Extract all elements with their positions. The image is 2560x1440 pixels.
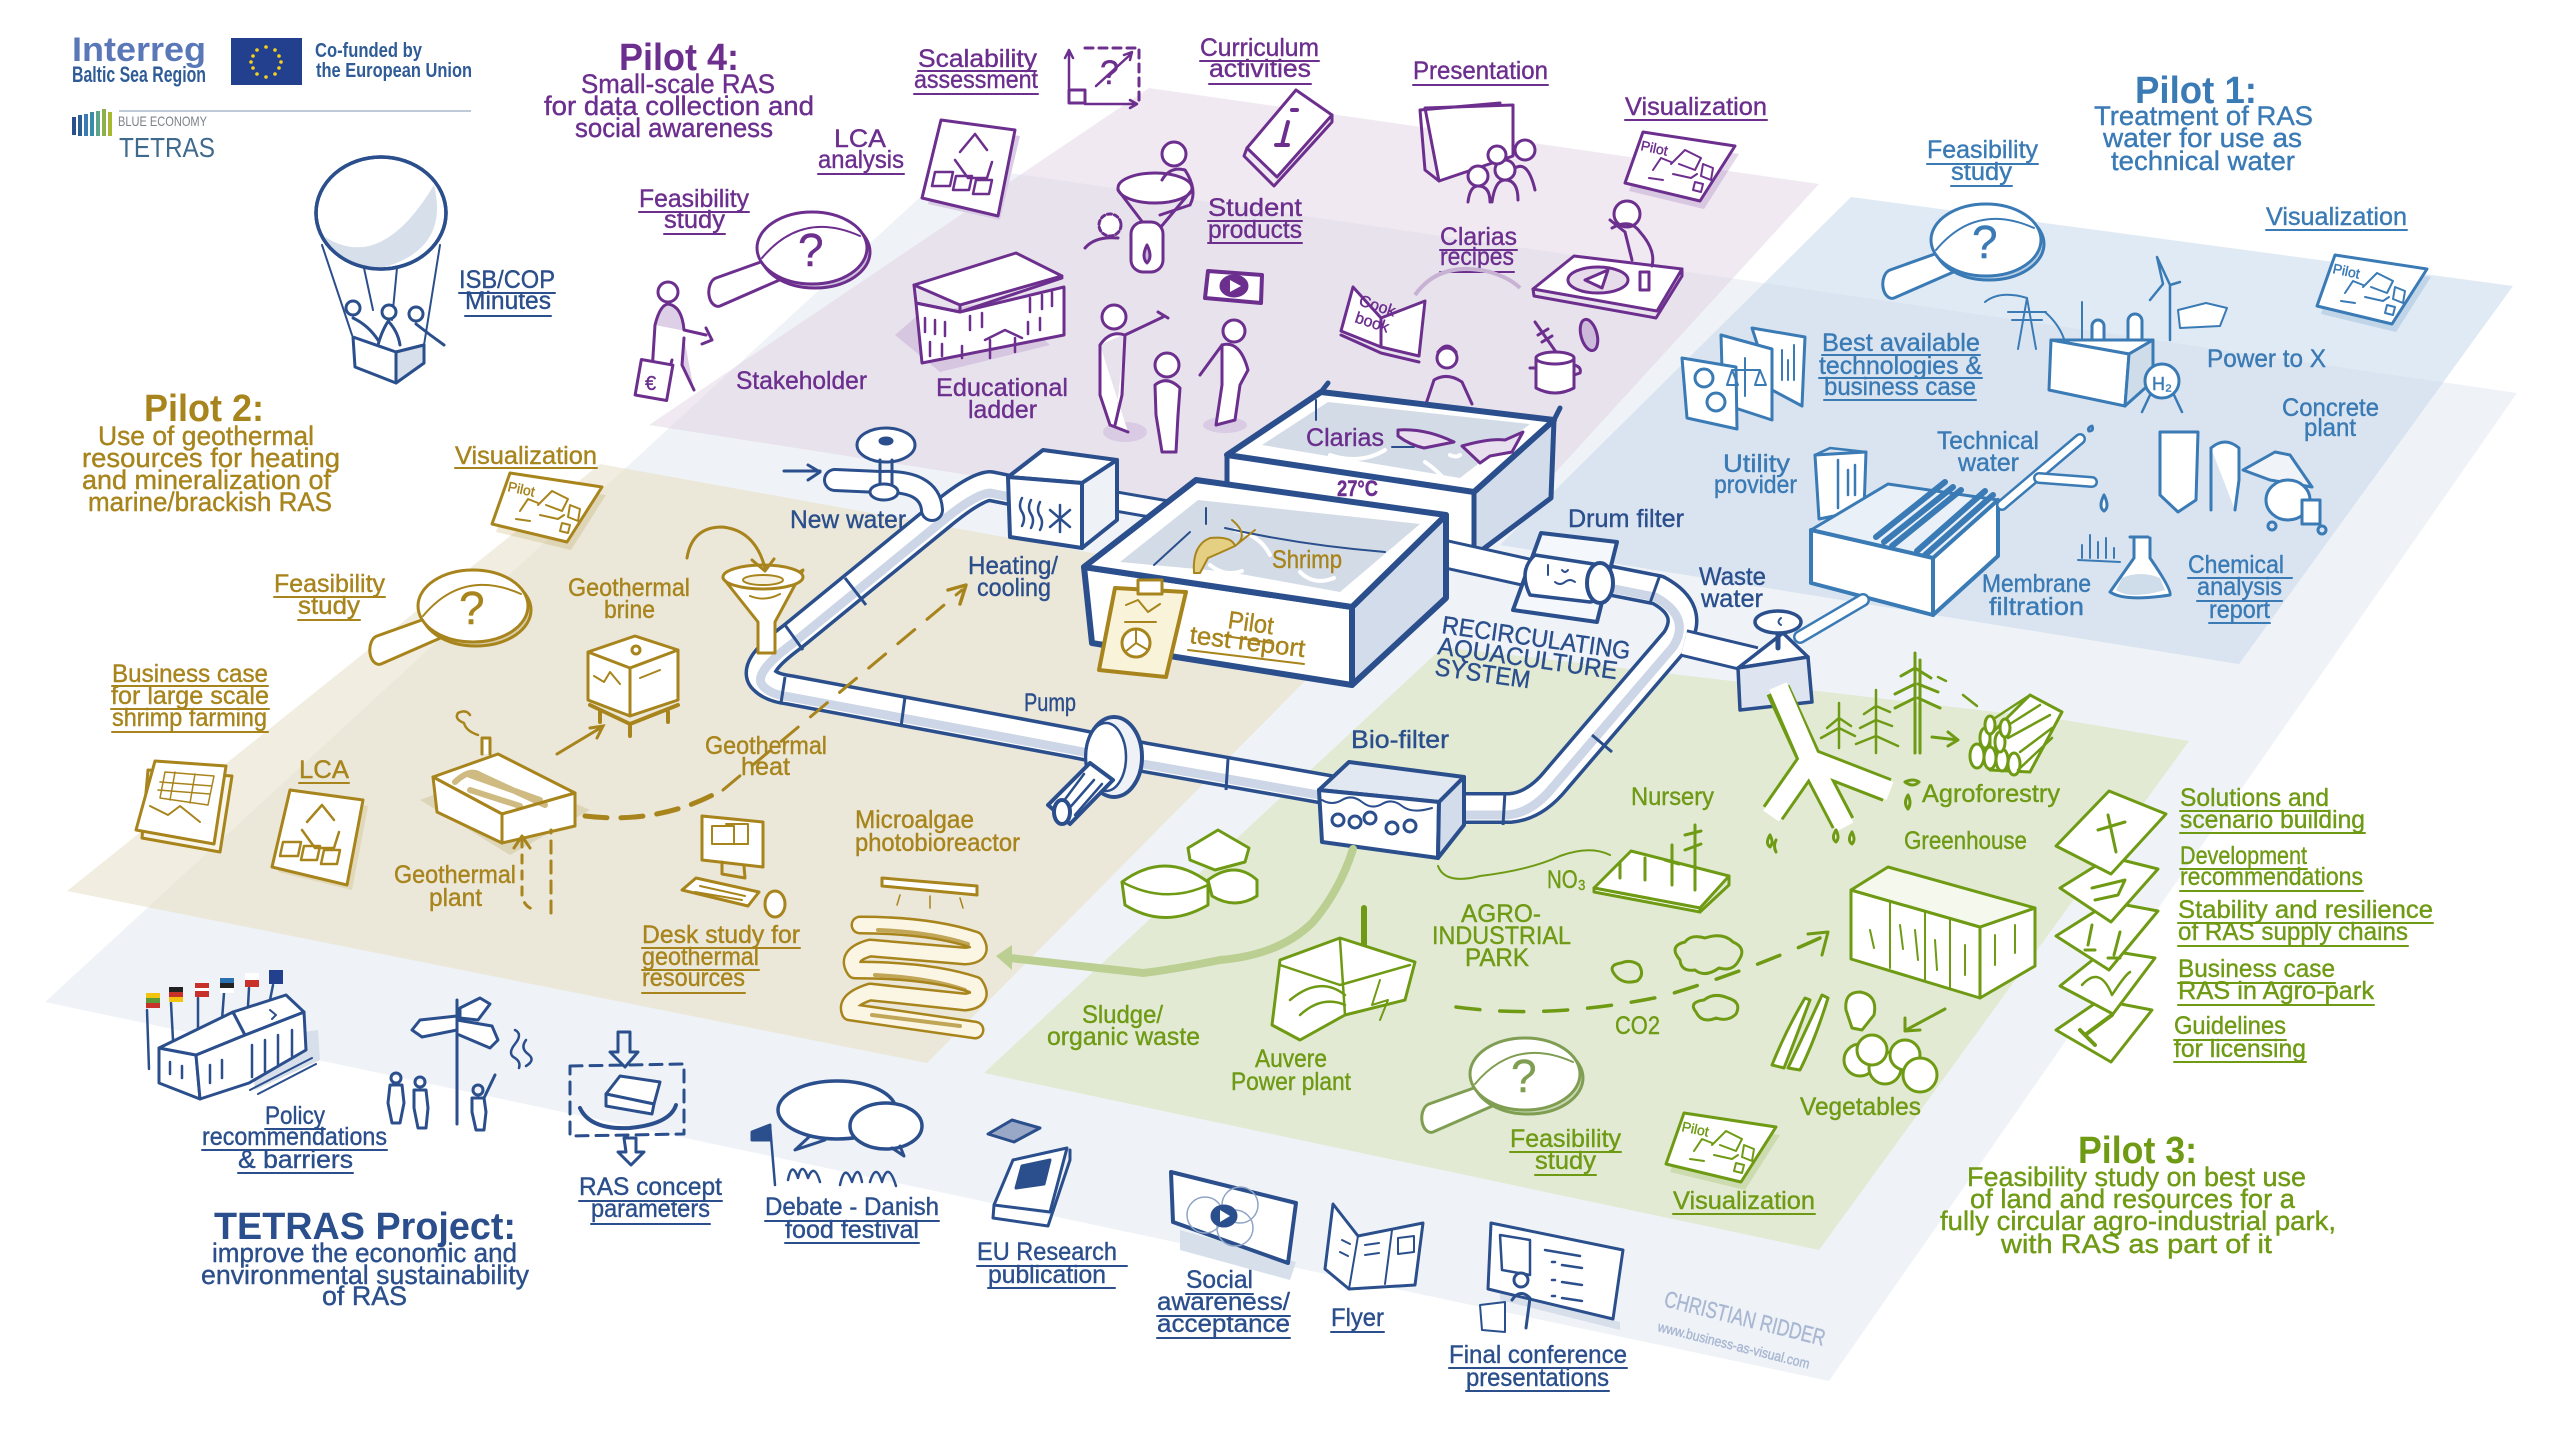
- icon: stacked cards: [2056, 791, 2166, 1062]
- label: LCA analysis: LCA: [834, 125, 886, 153]
- icon: signpost and people: [388, 998, 532, 1130]
- label: Feasibility study blue: Feasibility: [1927, 136, 2038, 164]
- heading: Pilot 3: of land and resources for a: [1970, 1184, 2296, 1214]
- label: Microalgae photobioreactor: Microalgae: [855, 806, 974, 834]
- icon: geothermal brine crate: [588, 636, 678, 736]
- icon: pump: [1048, 717, 1142, 824]
- label: Student products: products: [1208, 216, 1302, 244]
- label: Final conference presentations: presentations: [1466, 1364, 1609, 1392]
- label: LCA gold: LCA: [299, 756, 349, 784]
- label: Feasibility study green: study: [1535, 1147, 1596, 1175]
- label: Feasibility study gold: study: [298, 592, 361, 620]
- label: Clarias recipes: Clarias: [1440, 223, 1517, 251]
- EU flag: [231, 38, 302, 85]
- label: Geothermal brine: Geothermal: [568, 574, 690, 602]
- label: Heating/cooling: cooling: [977, 574, 1051, 602]
- icon: membrane filtration box: [1811, 482, 1998, 615]
- icon: scalability: ?: [1100, 54, 1119, 92]
- icon: visualization board gold: [492, 473, 606, 550]
- heading: Pilot 1: Pilot 1:: [2135, 70, 2257, 112]
- icon: bio-filter box: [1319, 762, 1464, 858]
- label: Stability and resilience of RAS supply chains: of RAS supply chains: [2178, 918, 2408, 946]
- label: Recirculating Aquaculture System: AQUACULTURE: [1436, 632, 1619, 685]
- label: Guidelines for licensing: for licensing: [2174, 1035, 2306, 1063]
- icon: biogas tanks: [1122, 830, 1257, 918]
- label: Feasibility study blue: study: [1951, 158, 2012, 186]
- icon: shrimp: [1194, 520, 1255, 573]
- icon: visualization board green: [1666, 1113, 1780, 1190]
- label: Feasibility study purple: study: [664, 206, 725, 234]
- icon: stakeholder with suitcase: €: [645, 373, 656, 395]
- label: Chemical analysis report: Chemical: [2188, 551, 2284, 579]
- icon: new water valve: [784, 428, 932, 510]
- icon: RAS concept dashed box: [570, 1032, 684, 1165]
- label: EU Research publication: EU Research: [977, 1238, 1117, 1266]
- label: Clarias recipes: recipes: [1440, 243, 1514, 271]
- icon: nitrate line to nursery: [1438, 850, 1610, 879]
- label: ISB/COP Minutes: Minutes: [465, 287, 551, 315]
- icon: arrow plant to brine: [557, 726, 603, 754]
- label: Stability and resilience of RAS supply chains: [2178, 896, 2433, 946]
- icon: video: [1205, 271, 1262, 303]
- label: Geothermal plant: [394, 861, 516, 912]
- icon: magnifier purple: ?: [798, 224, 824, 276]
- icon: power to X plant: [1985, 257, 2227, 412]
- icon: magnifier green: ?: [1511, 1050, 1537, 1102]
- label: Shrimp: Shrimp: [1272, 546, 1342, 574]
- icon: heat exchanger box: [1008, 450, 1117, 548]
- label: Presentation: Presentation: [1413, 57, 1548, 85]
- label: Clarias recipes: [1440, 223, 1517, 272]
- label: Debate Danish food festival: Debate - Danish: [765, 1193, 939, 1221]
- label: Agroforestry: Agroforestry: [1922, 780, 2060, 808]
- TETRAS text: TETRAS: [119, 132, 215, 163]
- European Union text: the European Union: [316, 60, 472, 82]
- label: Stability and resilience of RAS supply chains: Stability and resilience: [2178, 896, 2433, 924]
- label: Membrane filtration: Membrane: [1982, 570, 2091, 598]
- icon: gold funnel: [723, 565, 803, 653]
- credit: Christian Ridder: www.business-as-visual.com: [1655, 1318, 1812, 1372]
- label: Curriculum activities: Curriculum: [1200, 34, 1319, 62]
- background plane: pilot 4 purple: [649, 88, 1819, 555]
- label: Pilot test report: Pilot: [1226, 606, 1276, 640]
- icon: cook book: [1341, 287, 1425, 362]
- label: Concrete plant: plant: [2304, 414, 2356, 442]
- background plane: pilot 4 overlap: [649, 88, 1819, 555]
- icon: main pipe loop: [760, 486, 1755, 825]
- label: LCA analysis: [818, 125, 904, 174]
- icon: drum filter: [1513, 533, 1617, 622]
- label: Business case RAS in Agro-park: Business case: [2178, 955, 2335, 983]
- heading: Pilot 1: [2094, 70, 2313, 176]
- label: Best available technologies and business case: technologies &: [1819, 352, 1982, 380]
- icon: magnifier purple: [709, 212, 870, 306]
- credit: Christian Ridder: [1655, 1286, 1828, 1372]
- label: Chemical analysis report: analysis: [2197, 573, 2282, 601]
- label: Auvere Power plant: Auvere: [1255, 1045, 1327, 1073]
- icon: branching green pipe and drops: [1768, 686, 1919, 852]
- icon: desk study computer: [682, 816, 785, 917]
- label: Feasibility study gold: Feasibility: [274, 570, 385, 598]
- label: Utility provider: [1714, 450, 1797, 499]
- label: Business case for large scale shrimp farming: [111, 660, 269, 732]
- heading: Pilot 3: [1940, 1130, 2336, 1259]
- icon: power to X plant: H₂: [2152, 374, 2172, 394]
- label: Visualization gold: Visualization: [455, 442, 597, 470]
- icon: waste water outlet and pipe to membrane: [1738, 600, 1863, 710]
- icon: Auvere power plant: [1272, 908, 1415, 1040]
- label: Geothermal heat: Geothermal: [705, 732, 827, 760]
- label: Agro-industrial park: [1432, 900, 1571, 972]
- icon: sludge arrow: [1010, 849, 1353, 973]
- label: Guidelines for licensing: Guidelines: [2174, 1012, 2286, 1040]
- heading: Pilot 4: [544, 37, 814, 143]
- label: Sludge organic waste: Sludge/: [1082, 1001, 1163, 1029]
- icon: LCA document purple: [922, 120, 1020, 220]
- icon: magnifier blue: [1883, 204, 2044, 298]
- heading: Pilot 3: fully circular agro-industrial park,: [1940, 1206, 2336, 1236]
- label: Waste water: [1699, 563, 1766, 613]
- icon: cook book: Cook: [1357, 293, 1398, 321]
- label: Business case RAS in Agro-park: RAS in Agro-park: [2178, 977, 2375, 1005]
- label: Technical water: water: [1957, 449, 2019, 477]
- icon: magnifier gold: [370, 570, 531, 664]
- icon: debate speech bubbles and crowd: [752, 1081, 922, 1186]
- label: Educational ladder: Educational: [936, 374, 1068, 402]
- heading: Pilot 3: with RAS as part of it: [2000, 1229, 2273, 1259]
- label: Student products: Student: [1208, 194, 1302, 222]
- icon: student funnel and test tube: [1085, 142, 1193, 272]
- label: Sludge organic waste: organic waste: [1047, 1023, 1200, 1051]
- icon: clarias fish: [1398, 430, 1523, 463]
- heading: Pilot 4: Pilot 4:: [619, 37, 739, 79]
- label: Visualization blue: Visualization: [2266, 203, 2407, 231]
- label: Guidelines for licensing: [2174, 1012, 2306, 1063]
- icon: magnifier green: [1422, 1038, 1583, 1132]
- icon: parliament with flags: [146, 970, 320, 1099]
- heading: TETRAS Project: improve the economic and: [212, 1238, 517, 1268]
- label: Heating/cooling: [968, 552, 1058, 602]
- heading: Pilot 2: and mineralization of: [82, 465, 331, 495]
- co-funded text: Co-funded by: [315, 40, 423, 62]
- label: Microalgae photobioreactor: [855, 806, 1020, 857]
- label: Technical water: [1937, 427, 2039, 477]
- label: Curriculum activities: activities: [1209, 55, 1311, 83]
- label: Feasibility study purple: Feasibility: [639, 185, 749, 213]
- icon: visualization board gold: Pilot: [506, 478, 536, 500]
- background plane: pilot 2 overlap: [148, 468, 1304, 1063]
- label: Student products: [1208, 194, 1302, 244]
- label: Auvere Power plant: Power plant: [1231, 1068, 1351, 1096]
- label: Geothermal plant: Geothermal: [394, 861, 516, 889]
- label: RAS concept parameters: parameters: [591, 1195, 710, 1223]
- label: Greenhouse: Greenhouse: [1904, 827, 2027, 855]
- logo block: Blue Economy TETRAS: [74, 109, 471, 163]
- label: Clarias in tank: Clarias: [1306, 424, 1384, 452]
- heading: TETRAS Project: of RAS: [322, 1281, 407, 1311]
- label: Pilot test report: [1188, 606, 1307, 664]
- label: CO2: CO2: [1615, 1012, 1660, 1040]
- heading: Pilot 3: Pilot 3:: [2078, 1130, 2197, 1172]
- icon: concrete plant: [2160, 432, 2326, 534]
- label: Feasibility study purple: [639, 185, 749, 234]
- background plane: pilot 1 overlap: [1530, 328, 2442, 662]
- label: Business case for large scale shrimp farming: shrimp farming: [112, 704, 267, 732]
- icon: hot air balloon: [316, 157, 446, 383]
- label: Best available technologies and business case: Best available: [1822, 329, 1980, 357]
- icon: best available technology documents: [1682, 328, 1805, 429]
- icon: visualization board green: Pilot: [1680, 1118, 1710, 1140]
- label: Flyer: Flyer: [1331, 1304, 1384, 1332]
- label: Policy recommendations and barriers: & barriers: [238, 1146, 353, 1174]
- label: Concrete plant: Concrete: [2282, 394, 2379, 422]
- label: Educational ladder: [936, 374, 1068, 424]
- label: Waste water: water: [1700, 585, 1763, 613]
- icon: nursery planter: [1594, 825, 1729, 912]
- label: Recirculating Aquaculture System: RECIRCULATING: [1440, 611, 1632, 665]
- label: Membrane filtration: filtration: [1989, 593, 2084, 621]
- icon: forest trees: [1821, 653, 1977, 753]
- tank: Shrimp tank: [1084, 480, 1446, 685]
- label: Solutions and scenario building: [2180, 784, 2365, 834]
- icon: stakeholder with suitcase: [635, 282, 712, 401]
- icon: visualization board purple: [1625, 132, 1739, 209]
- heading: Pilot 2: Pilot 2:: [144, 388, 264, 430]
- icon: visualization board blue: [2317, 255, 2431, 332]
- heading: Pilot 4: for data collection and: [544, 91, 814, 121]
- label: Pump: Pump: [1024, 689, 1076, 717]
- icon: three people discussing: [1100, 305, 1248, 452]
- icon: technical water pipe: [2002, 426, 2107, 511]
- label: Social awareness acceptance: awareness/: [1157, 1288, 1290, 1316]
- heading: Pilot 2: Use of geothermal: [98, 421, 314, 451]
- label: Feasibility study gold: [274, 570, 385, 620]
- label: Concrete plant: [2282, 394, 2379, 442]
- icon: vegetables: [1772, 992, 1945, 1092]
- tank: Clarias tank: [1227, 383, 1560, 556]
- label: Geothermal plant: plant: [429, 884, 482, 912]
- heading: Pilot 3: Feasibility study on best use: [1967, 1162, 2306, 1192]
- label: Educational ladder: ladder: [968, 396, 1037, 424]
- label: Chemical analysis report: [2188, 551, 2292, 624]
- label: New water: New water: [790, 506, 906, 534]
- icon: LCA document gold: [272, 790, 368, 890]
- icon: business case documents gold: [136, 761, 232, 852]
- icon: utility building: [1815, 448, 1866, 519]
- icon: geothermal loop dashed arrows: [514, 830, 551, 913]
- label: Pilot test report: test report: [1188, 621, 1307, 663]
- label: Desk study for geothermal resources: geothermal: [642, 943, 759, 971]
- label: Agro-industrial park: PARK: [1465, 944, 1529, 972]
- icon: fish farmer: [1426, 346, 1472, 404]
- label: Technical water: Technical: [1937, 427, 2039, 455]
- icon: curriculum book: [1244, 90, 1332, 186]
- label: EU Research publication: publication: [988, 1261, 1106, 1289]
- heading: Pilot 2: marine/brackish RAS: [88, 487, 332, 517]
- label: Vegetables: Vegetables: [1800, 1093, 1921, 1121]
- icon: flyer: [1325, 1204, 1423, 1289]
- icon: stacked logs: [1970, 695, 2062, 775]
- label: Best available technologies and business case: business case: [1824, 373, 1976, 401]
- credit: Christian Ridder: CHRISTIAN RIDDER: [1662, 1286, 1828, 1351]
- label: RAS concept parameters: RAS concept: [579, 1173, 722, 1201]
- heading: Pilot 2: resources for heating: [82, 443, 340, 473]
- icon: CO2 clouds: [1612, 936, 1742, 1020]
- label: Development recommendations: Development: [2180, 842, 2307, 870]
- label: Geothermal heat: [705, 732, 827, 781]
- label: Geothermal heat: heat: [741, 753, 790, 781]
- label: Heating/cooling: Heating/: [968, 552, 1058, 580]
- label: Utility provider: Utility: [1723, 450, 1791, 478]
- label: Development recommendations: [2180, 842, 2363, 891]
- label: RAS concept parameters: [579, 1173, 722, 1224]
- label: Scalability assessment: assessment: [914, 66, 1038, 94]
- label: Geothermal brine: [568, 574, 690, 624]
- background plane: pilot 1 blue: [1500, 197, 2513, 664]
- icon: greenhouse: [1851, 867, 2035, 998]
- label: Social awareness acceptance: Social: [1186, 1266, 1253, 1294]
- label: Waste water: Waste: [1699, 563, 1766, 591]
- label: EU Research publication: [977, 1238, 1127, 1289]
- label: Final conference presentations: Final conference: [1449, 1341, 1627, 1369]
- label: Scalability assessment: Scalability: [918, 45, 1038, 73]
- label: Chemical analysis report: report: [2209, 596, 2270, 624]
- label: Power to X: Power to X: [2207, 345, 2326, 373]
- label: Bio-filter: Bio-filter: [1351, 726, 1449, 754]
- label: Business case RAS in Agro-park: [2178, 955, 2375, 1005]
- label: Feasibility study blue: [1927, 136, 2038, 186]
- label: Desk study for geothermal resources: Desk study for: [642, 921, 800, 949]
- label: temperature 27°C: 27°C: [1337, 476, 1378, 501]
- label: Best available technologies and business case: [1819, 329, 1982, 401]
- label: Business case for large scale shrimp farming: Business case: [112, 660, 268, 688]
- label: Recirculating Aquaculture System: SYSTEM: [1433, 653, 1532, 694]
- label: Policy recommendations and barriers: Policy: [265, 1102, 325, 1130]
- label: Geothermal brine: brine: [604, 596, 655, 624]
- label: Development recommendations: recommendations: [2180, 863, 2363, 891]
- icon: lab flask and chart: [2078, 535, 2170, 598]
- label: LCA analysis: analysis: [818, 146, 904, 174]
- icon: presentation audience: [1420, 103, 1535, 202]
- label: Auvere Power plant: [1231, 1045, 1351, 1096]
- icon: sludge arrowhead: [996, 945, 1012, 970]
- label: Social awareness acceptance: [1157, 1266, 1290, 1338]
- label: Sludge organic waste: [1047, 1001, 1200, 1051]
- label: Nursery: Nursery: [1631, 783, 1714, 811]
- label: Desk study for geothermal resources: [642, 921, 800, 993]
- label: Scalability assessment: [914, 45, 1038, 94]
- label: Microalgae photobioreactor: photobioreactor: [855, 829, 1020, 857]
- label: Debate Danish food festival: [765, 1193, 939, 1244]
- icon: cook book: book: [1353, 310, 1392, 337]
- icon: geothermal plant: [420, 711, 590, 855]
- heading: Pilot 1: water for use as: [2102, 123, 2302, 153]
- label: Social awareness acceptance: acceptance: [1157, 1310, 1290, 1338]
- label: ISB/COP Minutes: [459, 266, 555, 316]
- heading: TETRAS Project: [201, 1206, 529, 1311]
- icon: test report clipboard: [1099, 580, 1186, 677]
- background plane: pilot 2 beige: [67, 464, 1380, 1063]
- label: Policy recommendations and barriers: [202, 1102, 387, 1174]
- label: Visualization purple: Visualization: [1625, 93, 1767, 121]
- label: Business case for large scale shrimp farming: for large scale: [111, 682, 269, 710]
- label: Desk study for geothermal resources: resources: [642, 964, 745, 992]
- icon: EU research book: [988, 1120, 1070, 1226]
- label: Agro-industrial park: AGRO-: [1461, 900, 1541, 928]
- Interreg wordmark: Interreg: [72, 31, 206, 69]
- heading: Pilot 4: social awareness: [575, 113, 773, 143]
- label: Curriculum activities: [1200, 34, 1319, 84]
- icon: curved arrow to dish: [1415, 269, 1520, 295]
- icon: final conference screen and speaker: [1480, 1223, 1623, 1332]
- label: Feasibility study green: Feasibility: [1510, 1125, 1621, 1153]
- arrow: geothermal heat dashed: [585, 585, 966, 818]
- heading: Pilot 2: [82, 388, 340, 517]
- heading: Pilot 4: Small-scale RAS: [581, 69, 775, 99]
- icon: microalgae photobioreactor: [849, 878, 978, 1030]
- icon: magnifier blue: ?: [1972, 216, 1998, 268]
- icon: visualization board purple: Pilot: [1639, 137, 1669, 159]
- arrow: CO2 dashed: [1456, 932, 1828, 1012]
- heading: Pilot 1: Treatment of RAS: [2094, 101, 2313, 131]
- label: Debate Danish food festival: food festival: [785, 1216, 919, 1244]
- logo bars: [74, 109, 110, 136]
- label: Utility provider: provider: [1714, 471, 1797, 499]
- heading: Pilot 1: technical water: [2111, 146, 2295, 176]
- label: Membrane filtration: [1982, 570, 2091, 621]
- heading: TETRAS Project: environmental sustainability: [201, 1260, 529, 1290]
- Baltic Sea Region: Baltic Sea Region: [72, 62, 206, 87]
- icon: social awareness video: [1171, 1172, 1296, 1280]
- label: Policy recommendations and barriers: recommendations: [202, 1123, 387, 1151]
- label: Feasibility study green: [1510, 1125, 1621, 1175]
- label: ISB/COP Minutes: ISB/COP: [459, 266, 555, 294]
- logo block: Interreg and EU co-funding: [72, 31, 472, 87]
- label: Agro-industrial park: INDUSTRIAL: [1432, 922, 1571, 950]
- label: Stakeholder: Stakeholder: [736, 367, 867, 395]
- Blue Economy text: BLUE ECONOMY: [118, 113, 208, 129]
- icon: chef and plate table: [1533, 201, 1682, 318]
- label: Recirculating Aquaculture System: [1433, 611, 1632, 694]
- background plane: pilot 3 green: [984, 647, 2189, 1250]
- label: NO3: NO₃: [1547, 866, 1586, 894]
- icon: arc arrow into funnel: [687, 527, 774, 571]
- label: Visualization green: Visualization: [1673, 1187, 1815, 1215]
- label: Solutions and scenario building: scenario building: [2180, 806, 2365, 834]
- icon: visualization board blue: Pilot: [2331, 260, 2361, 282]
- icon: pot with fish bone: [1530, 317, 1601, 393]
- icon: magnifier gold: ?: [459, 582, 485, 634]
- label: Solutions and scenario building: Solutions and: [2180, 784, 2329, 812]
- label: Drum filter: Drum filter: [1568, 505, 1684, 533]
- icon: scalability: [1065, 48, 1139, 108]
- label: Final conference presentations: [1449, 1341, 1627, 1392]
- icon: educational building: [895, 253, 1064, 372]
- heading: TETRAS Project: TETRAS Project:: [214, 1206, 516, 1248]
